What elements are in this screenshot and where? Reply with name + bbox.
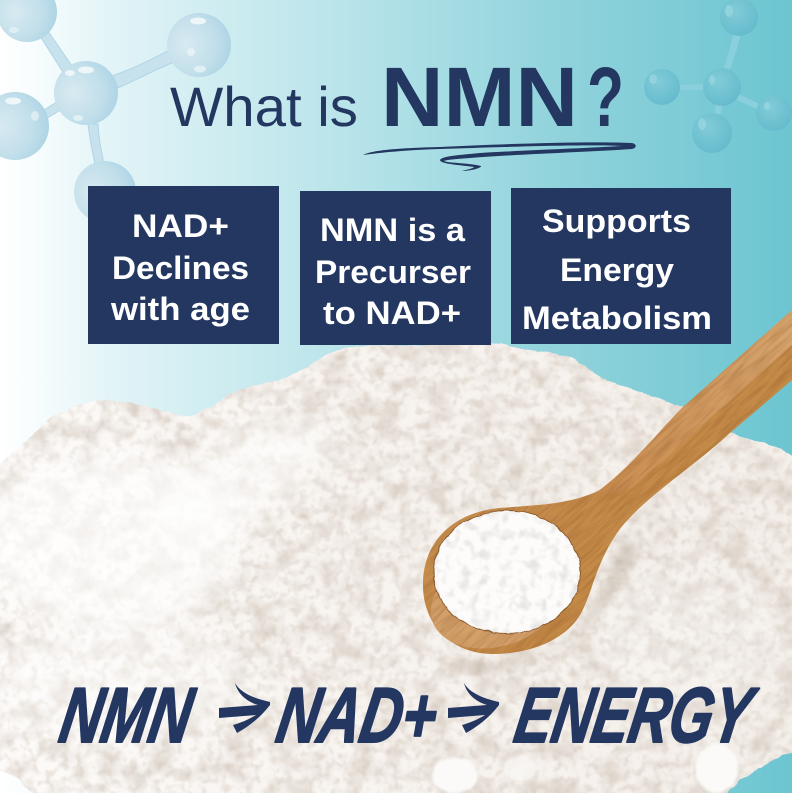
info box: supports energy metabolism [511,188,731,344]
info box: supports energy metabolism: Supports [542,203,691,239]
flow text: NMN to NAD+ to energy: NAD+ [271,672,444,759]
arrow: NAD+ to energy [448,683,499,733]
spoonful of powder [432,510,581,634]
flow text: NMN to NAD+ to energy [54,672,763,759]
info box: NAD+ declines [88,186,279,344]
title: NMN [381,50,578,144]
info box: NMN is a precursor: NMN is a [320,212,465,248]
info box: NAD+ declines: Declines [112,250,249,286]
info box: supports energy metabolism: Energy [560,252,674,288]
powder beads [431,743,740,793]
flow text: NMN to NAD+ to energy: NMN [54,672,201,759]
arrow: NMN to NAD+ [219,683,270,733]
title [170,50,624,144]
spoon handle and bowl [423,310,792,654]
wooden spoon [422,310,792,676]
bowl lip [418,535,576,665]
info box: NMN is a precursor [300,191,491,345]
wood grain [423,312,792,654]
molecule: right cluster [644,0,792,153]
title: ? [587,50,624,144]
title underline swoosh [363,142,636,171]
info box: supports energy metabolism: Metabolism [522,300,712,336]
molecule: left cluster [0,0,231,223]
spoon shadow [436,540,640,673]
title: What is [170,75,358,138]
info box: NAD+ declines: with age [110,291,250,327]
info box: NMN is a precursor: Precurser [315,254,471,290]
info box: NAD+ declines: NAD+ [132,208,229,244]
powder pile [0,330,792,793]
powder highlights [0,395,790,740]
handle top face [598,310,792,494]
info box: NMN is a precursor: to NAD+ [323,295,461,331]
